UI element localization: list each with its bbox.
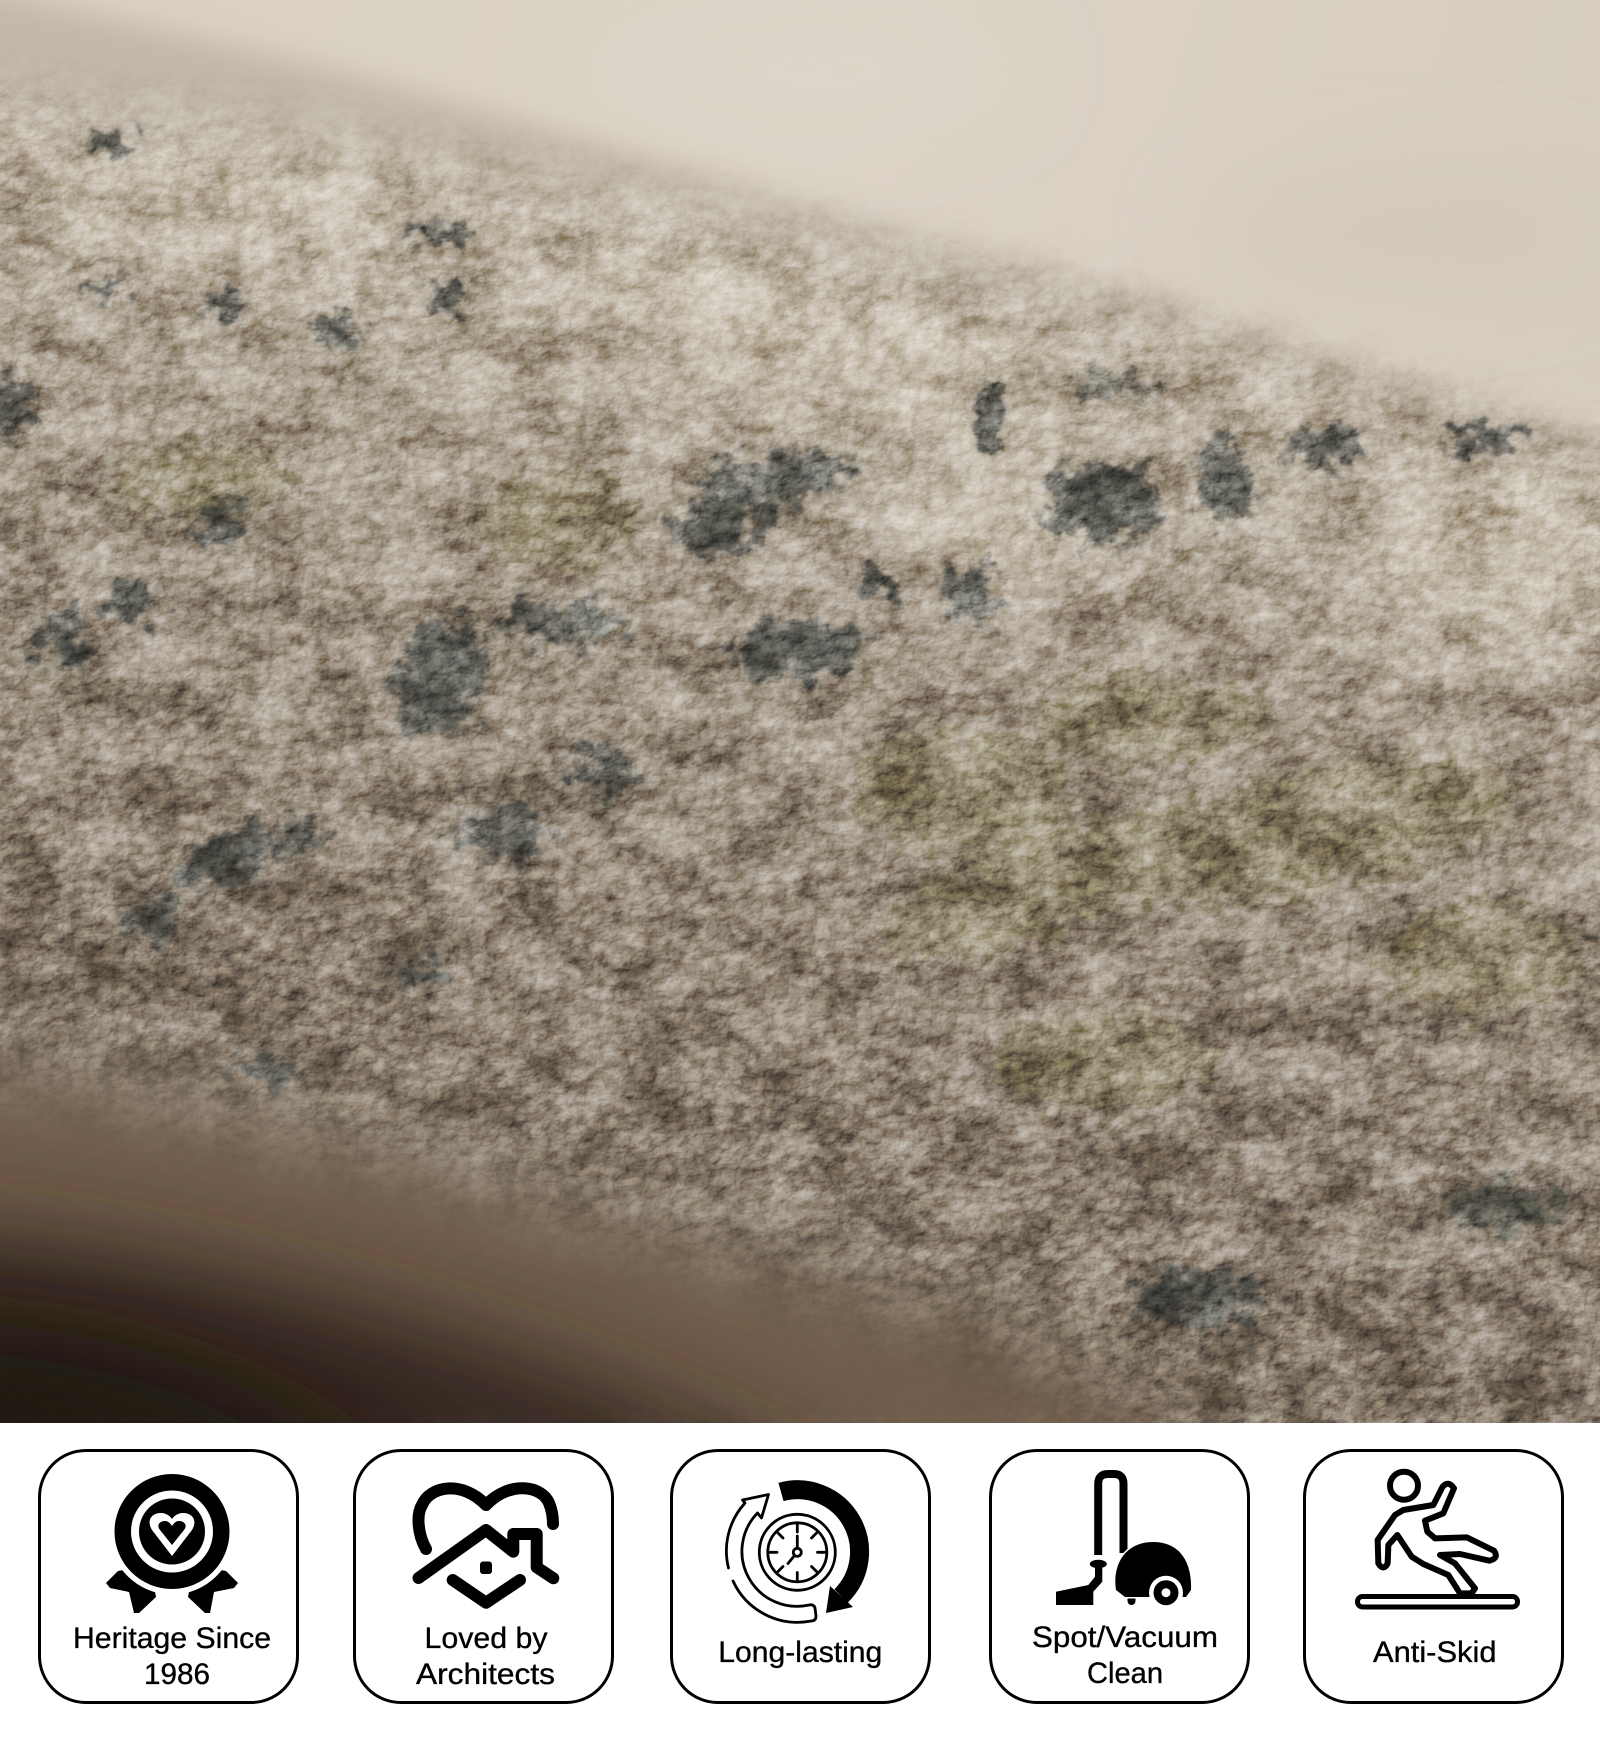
card: Loved by Architects — [353, 1449, 614, 1704]
slate patches — [0, 132, 1566, 1378]
icon: heart and house — [418, 1488, 553, 1602]
label: Spot/Vacuum Clean: Clean — [1086, 1656, 1162, 1690]
label: Spot/Vacuum Clean — [1032, 1620, 1218, 1690]
card: Spot/Vacuum Clean — [989, 1449, 1250, 1704]
icon: vacuum cleaner — [1056, 1474, 1191, 1609]
label: Loved by Architects: Loved by — [424, 1622, 547, 1654]
light patches — [40, 145, 1600, 650]
dark shading — [0, 910, 440, 1050]
card: Anti-Skid — [1303, 1449, 1564, 1704]
label: Heritage Since 1986: Heritage Since — [72, 1622, 270, 1654]
label: Long-lasting: Long-lasting — [718, 1636, 882, 1668]
icon: medal with heart — [106, 1468, 238, 1612]
card: Long-lasting — [670, 1449, 931, 1704]
label: Spot/Vacuum Clean: Spot/Vacuum — [1032, 1620, 1218, 1654]
soft brown foreground — [0, 1070, 1260, 1480]
label: Anti-Skid: Anti-Skid — [1372, 1636, 1496, 1668]
label: Heritage Since 1986: 1986 — [144, 1658, 210, 1690]
label: Heritage Since 1986 — [72, 1622, 270, 1690]
icon: clock with cycle arrows — [726, 1489, 859, 1622]
label: Loved by Architects: Architects — [416, 1658, 554, 1690]
label: Loved by Architects — [416, 1622, 554, 1690]
icon: slipping figure — [1357, 1471, 1517, 1606]
card: Heritage Since 1986 — [38, 1449, 299, 1704]
khaki patches — [110, 444, 1580, 1110]
